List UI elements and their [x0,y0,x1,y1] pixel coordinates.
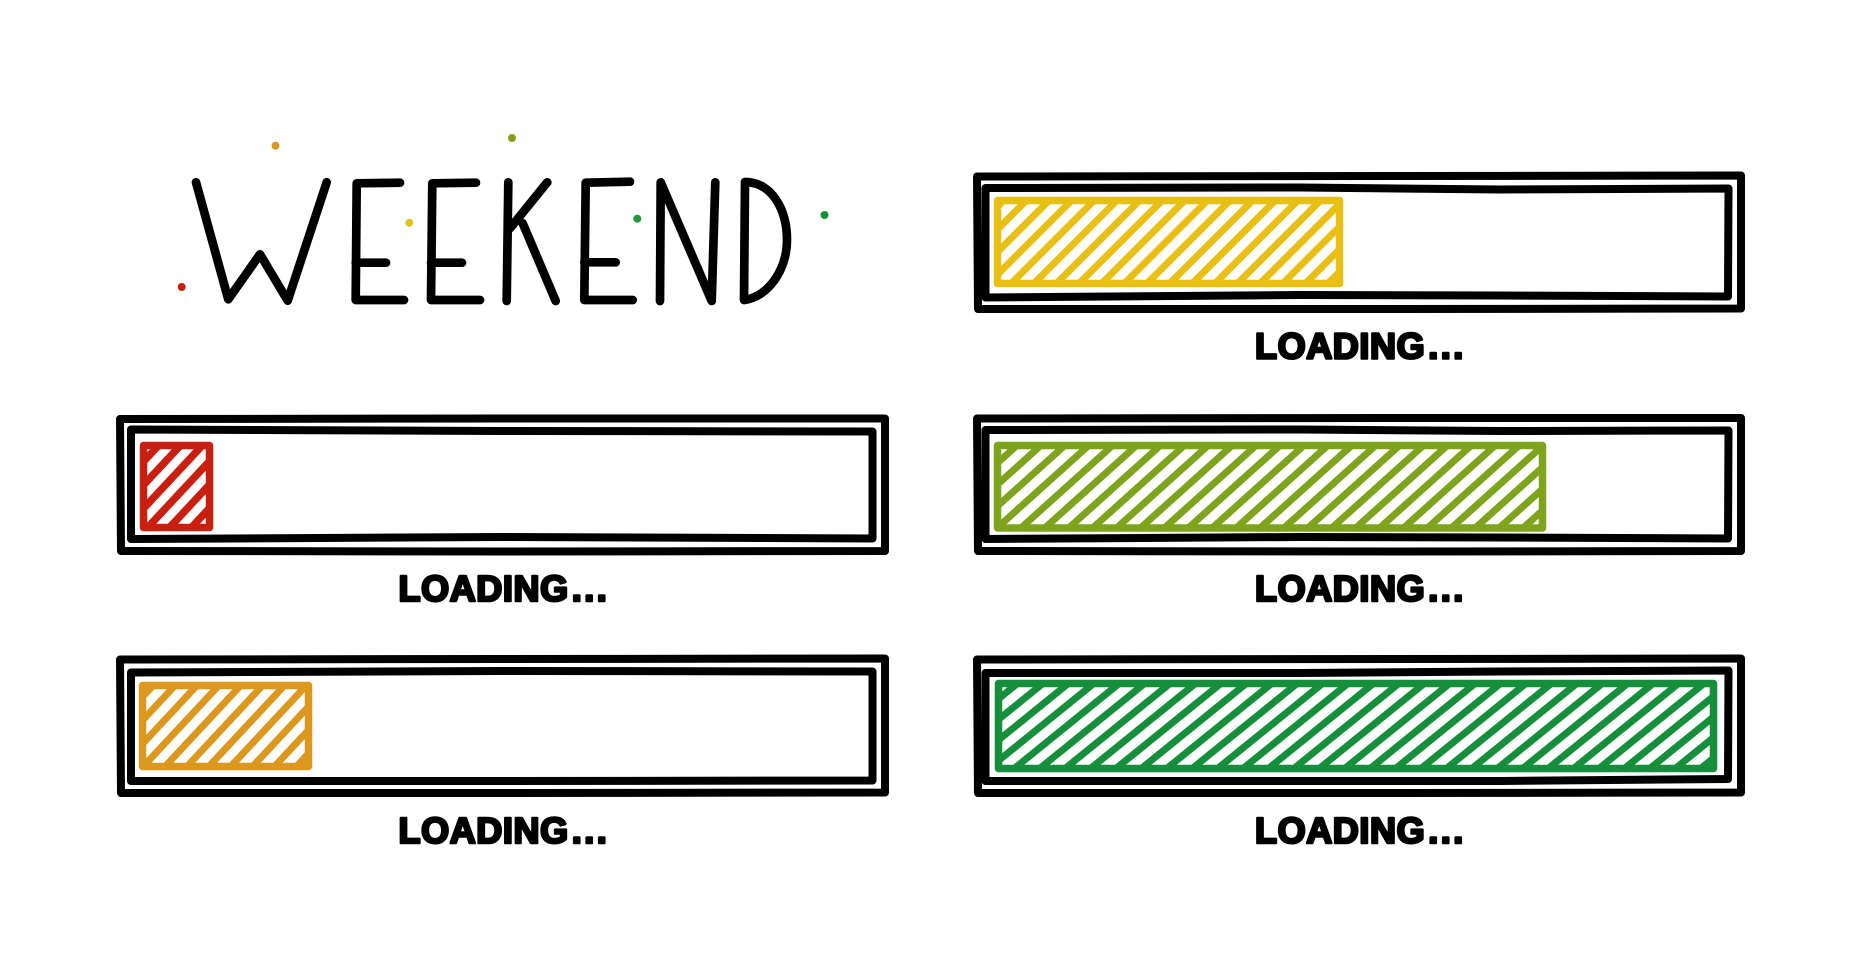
label: loading: LOADING... [398,810,609,851]
confetti dots [178,134,828,291]
label: loading: LOADING... [1255,810,1466,851]
label: loading: LOADING... [1255,326,1466,366]
loading bar: olive [977,418,1741,552]
title: WEEKEND [196,182,787,301]
label: loading: LOADING... [398,568,609,609]
loading bar: orange [120,658,885,793]
loading bar: green [977,658,1741,793]
label: loading: LOADING... [1255,568,1466,609]
loading bar: yellow [977,176,1741,309]
loading bar: red [120,418,885,552]
